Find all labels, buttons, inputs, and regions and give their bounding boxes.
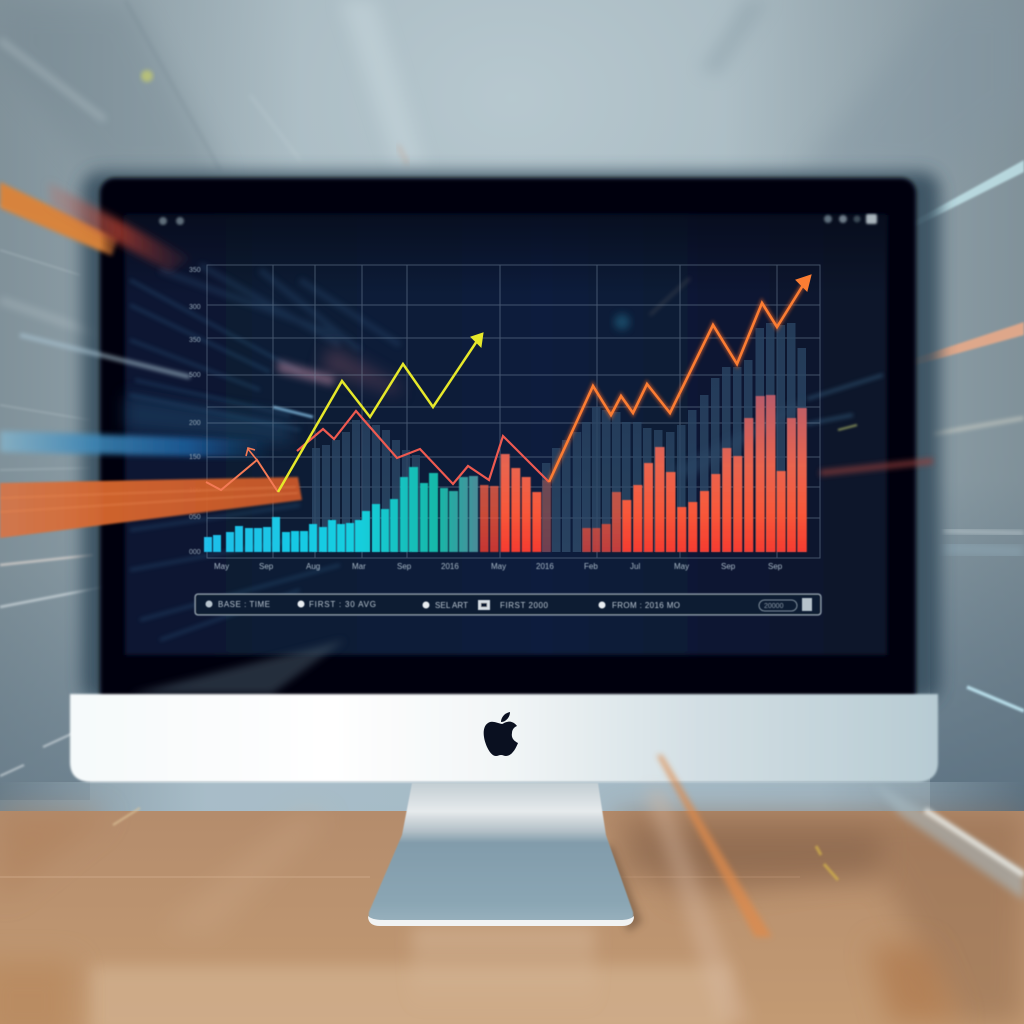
streak: red top left	[48, 182, 190, 272]
legend button: 20000	[764, 603, 784, 610]
chart: x-axis labels: May	[214, 562, 229, 571]
chart: red bars	[480, 395, 807, 552]
streak: pale left	[20, 335, 190, 377]
chart: orange line with arrow	[549, 275, 811, 482]
legend bar	[195, 594, 821, 615]
chart: x-axis labels: Feb	[584, 562, 598, 571]
legend item 3: SEL ART	[435, 601, 468, 610]
dust specks	[141, 70, 838, 880]
background: wooden desk	[0, 811, 1024, 1024]
streak: red across bezel right	[820, 458, 933, 476]
chart: grid	[207, 265, 820, 558]
chart: y-axis labels: 200	[189, 420, 201, 427]
motion streaks: bottom	[645, 755, 1024, 1024]
chart: x-axis labels: Jul	[630, 562, 640, 571]
orange motion band	[0, 473, 305, 538]
motion streaks: right wall	[885, 160, 1024, 711]
chart: dark background bars	[312, 323, 806, 552]
chart: x-axis labels	[214, 562, 783, 571]
chart: y-axis labels	[189, 267, 201, 556]
monitor: silver chin	[70, 694, 938, 782]
legend item 4: FIRST 2000	[500, 601, 549, 610]
chart: y-axis labels: 150	[189, 454, 201, 461]
chart: x-axis labels: Sep	[721, 562, 736, 571]
background: blurred wall	[0, 0, 1024, 815]
chart: y-axis labels: 350	[189, 267, 201, 274]
legend item 2: FIRST : 30 AVG	[309, 600, 376, 609]
chart: x-axis labels: May	[491, 562, 506, 571]
icon: apple logo	[484, 712, 518, 756]
streak: blue band left	[0, 431, 270, 458]
chart: y-axis labels: 000	[189, 549, 201, 556]
monitor: black bezel	[100, 178, 916, 708]
chart: cyan bars	[204, 467, 478, 552]
chart: y-axis labels: 100	[189, 487, 201, 494]
chart: x-axis labels: Mar	[352, 562, 366, 571]
chart: x-axis labels: Sep	[259, 562, 274, 571]
streak: orange top left	[0, 182, 118, 256]
chart: x-axis labels: 2016	[536, 562, 554, 571]
chart: x-axis labels: Sep	[768, 562, 783, 571]
monitor: lower bezel light sweep	[130, 640, 345, 694]
window controls	[159, 214, 877, 225]
monitor: screen	[125, 215, 887, 655]
chart: y-axis labels: 350	[189, 337, 201, 344]
chart: red line	[297, 411, 549, 484]
chart: x-axis labels: Aug	[306, 562, 320, 571]
legend item 5: FROM : 2016 MO	[612, 601, 680, 610]
chart: x-axis labels: 2016	[441, 562, 459, 571]
legend item 1: BASE : TIME	[218, 600, 270, 609]
chart: x-axis labels: May	[674, 562, 689, 571]
chart: small salmon line with arrow	[206, 448, 278, 492]
monitor: stand	[368, 783, 634, 926]
chart: yellow line with arrow	[278, 333, 483, 492]
legend button	[759, 598, 812, 611]
chart: y-axis labels: 300	[189, 304, 201, 311]
chart: x-axis labels: Sep	[397, 562, 412, 571]
stand shadow on desk	[602, 845, 642, 932]
legend item 4	[478, 600, 549, 610]
stand reflection on desk	[412, 926, 595, 1010]
chart: y-axis labels: 500	[189, 372, 201, 379]
chart: y-axis labels: 050	[189, 514, 201, 521]
motion streaks: left wall	[0, 205, 155, 825]
monitor: soft halo of moving bezel	[82, 172, 940, 702]
